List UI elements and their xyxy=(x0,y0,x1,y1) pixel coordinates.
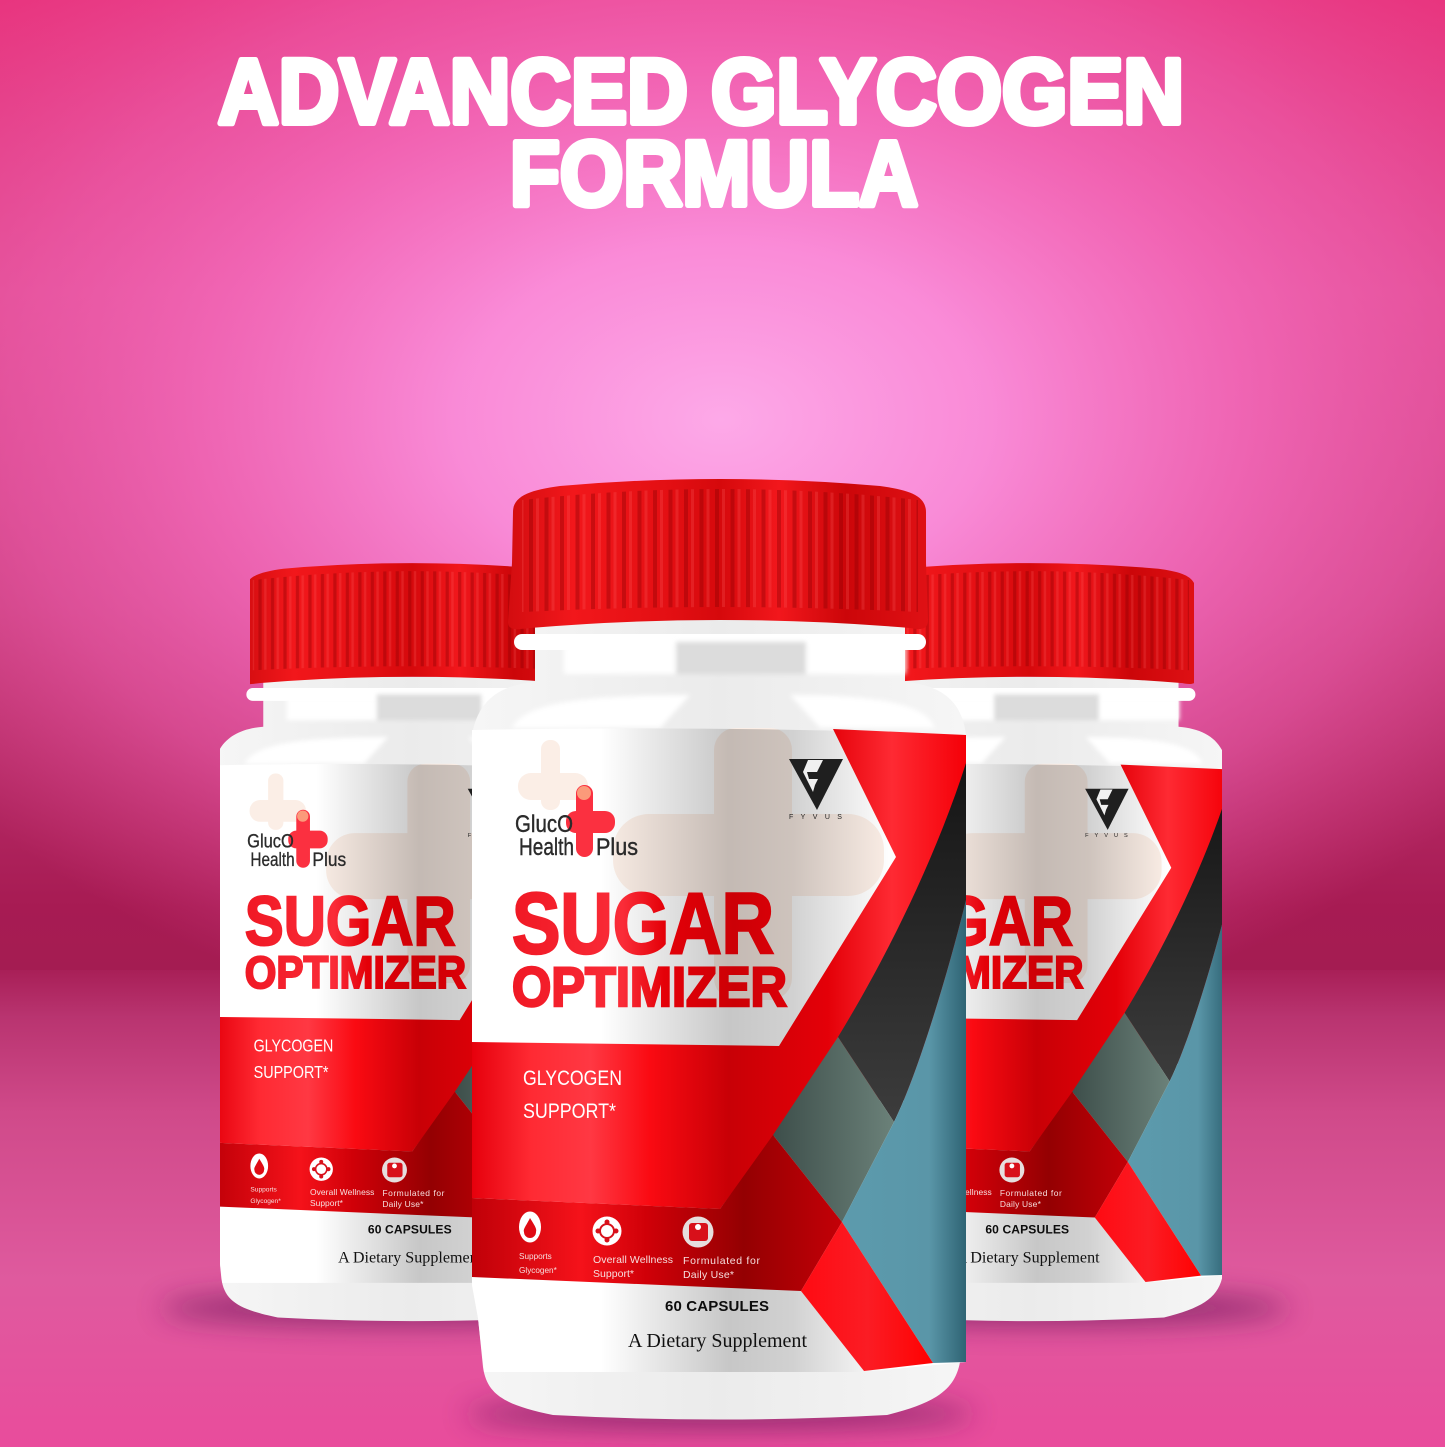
icon captions: Formulated for xyxy=(683,1255,760,1267)
FYVUS logo xyxy=(1085,788,1129,837)
lower red panel xyxy=(477,1162,584,1282)
SUGAR OPTIMIZER name: OPTIMIZER xyxy=(512,955,787,1018)
SUGAR OPTIMIZER name xyxy=(245,895,467,990)
glycogen support: GLYCOGEN xyxy=(254,1036,333,1056)
dark band xyxy=(507,792,610,1081)
glycogen support: SUPPORT* xyxy=(523,1099,617,1123)
lower red panel xyxy=(1095,1162,1201,1282)
icon: scale xyxy=(999,1157,1024,1182)
icon: wellness xyxy=(310,1157,333,1181)
icon captions xyxy=(966,1189,1062,1208)
top red chevron xyxy=(472,729,966,1209)
floor shadow of bottles xyxy=(160,1291,1290,1429)
icon captions: Formulated for xyxy=(1000,1188,1062,1198)
dietary supplement: A Dietary Supplement xyxy=(338,1250,483,1267)
bottle shell xyxy=(905,676,1222,1322)
bottle shell xyxy=(472,620,966,1420)
product label xyxy=(966,764,1222,1283)
FYVUS logo: FYVUS xyxy=(1085,833,1134,839)
icon captions: Daily Use* xyxy=(1000,1199,1042,1209)
neck highlights xyxy=(246,688,506,764)
product label xyxy=(472,728,966,1372)
title: ADVANCED GLYCOGEN xyxy=(218,41,1184,143)
product label xyxy=(220,764,472,1283)
title: FORMULA xyxy=(510,123,918,225)
SUGAR OPTIMIZER name: SUGAR xyxy=(512,876,774,972)
icon captions: Overall Wellness xyxy=(310,1187,374,1197)
icon: wellness xyxy=(592,1216,622,1246)
icon captions: Overall Wellness xyxy=(927,1187,992,1197)
glycogen support xyxy=(523,1066,622,1123)
teal panel xyxy=(842,900,966,1363)
neck highlights xyxy=(933,688,1198,764)
icon captions: Glycogen* xyxy=(250,1198,281,1205)
icon captions: Supports xyxy=(519,1252,552,1261)
floor xyxy=(0,970,1445,1447)
brand logo: GlucO xyxy=(247,832,294,853)
brand logo: Plus xyxy=(312,850,346,871)
grey-green panel xyxy=(1072,1013,1170,1162)
red ribbed cap xyxy=(905,563,1194,684)
icon captions: Overall Wellness xyxy=(593,1254,673,1266)
SUGAR OPTIMIZER name: OPTIMIZER xyxy=(245,947,466,998)
SUGAR OPTIMIZER name: SUGAR xyxy=(245,882,456,960)
icon: drop xyxy=(519,1212,541,1242)
red ribbed cap xyxy=(508,479,928,629)
top red chevron xyxy=(966,764,1222,1152)
FYVUS logo: FYVUS xyxy=(789,814,849,821)
FYVUS logo: FYVUS xyxy=(468,833,516,839)
dietary supplement: A Dietary Supplement xyxy=(956,1250,1100,1267)
brand logo xyxy=(515,785,638,861)
left back bottle xyxy=(220,563,535,1322)
icon captions: Daily Use* xyxy=(683,1269,734,1281)
glycogen support: SUPPORT* xyxy=(254,1062,329,1082)
FYVUS logo xyxy=(468,788,472,837)
pale cross marks xyxy=(250,764,472,983)
brand logo: Plus xyxy=(596,834,638,861)
icon: scale xyxy=(382,1157,407,1182)
brand logo: Health xyxy=(250,850,295,871)
teal panel xyxy=(510,902,610,1276)
SUGAR OPTIMIZER name xyxy=(966,895,1084,989)
pale cross marks xyxy=(518,728,884,1000)
icon captions xyxy=(519,1252,760,1281)
brand logo: GlucO xyxy=(515,811,573,838)
brand logo xyxy=(247,810,346,871)
icon captions: Daily Use* xyxy=(382,1199,424,1209)
red ribbed cap xyxy=(250,563,535,684)
60 capsules: 60 CAPSULES xyxy=(985,1223,1069,1237)
neck highlights xyxy=(512,634,935,728)
dark band xyxy=(1124,809,1222,1082)
title xyxy=(218,41,1184,225)
brand logo: Health xyxy=(519,834,574,861)
icon captions: Formulated for xyxy=(382,1188,445,1198)
SUGAR OPTIMIZER name: SUGAR xyxy=(862,882,1073,960)
grey-green panel xyxy=(454,1066,472,1114)
bottle shell xyxy=(220,676,535,1322)
icon captions: Supports xyxy=(250,1187,277,1194)
right back bottle xyxy=(905,563,1222,1322)
teal panel xyxy=(1128,924,1222,1276)
glycogen support: GLYCOGEN xyxy=(523,1066,622,1090)
icon captions: Glycogen* xyxy=(519,1266,558,1275)
lower red panel xyxy=(801,1222,933,1371)
glycogen support xyxy=(254,1040,332,1078)
pale cross marks xyxy=(966,764,1162,983)
dark red band xyxy=(966,1092,1128,1218)
icon captions: Support* xyxy=(310,1198,344,1208)
dark red band xyxy=(472,1135,842,1291)
FYVUS logo xyxy=(789,759,849,821)
dark band xyxy=(838,763,966,1122)
dietary supplement: A Dietary Supplement xyxy=(628,1330,807,1352)
background wall xyxy=(0,0,1445,975)
60 capsules: 60 CAPSULES xyxy=(368,1223,452,1237)
icon: drop xyxy=(250,1153,268,1178)
center bottle xyxy=(472,479,966,1420)
icon captions: Support* xyxy=(593,1268,634,1280)
SUGAR OPTIMIZER name: OPTIMIZER xyxy=(862,947,1084,998)
dark red band xyxy=(220,1092,472,1218)
icon captions xyxy=(250,1187,445,1209)
top red chevron xyxy=(220,1000,472,1152)
icon: scale xyxy=(682,1216,714,1248)
SUGAR OPTIMIZER name xyxy=(512,876,787,1018)
grey-green panel xyxy=(773,1037,894,1222)
60 capsules: 60 CAPSULES xyxy=(665,1298,769,1315)
